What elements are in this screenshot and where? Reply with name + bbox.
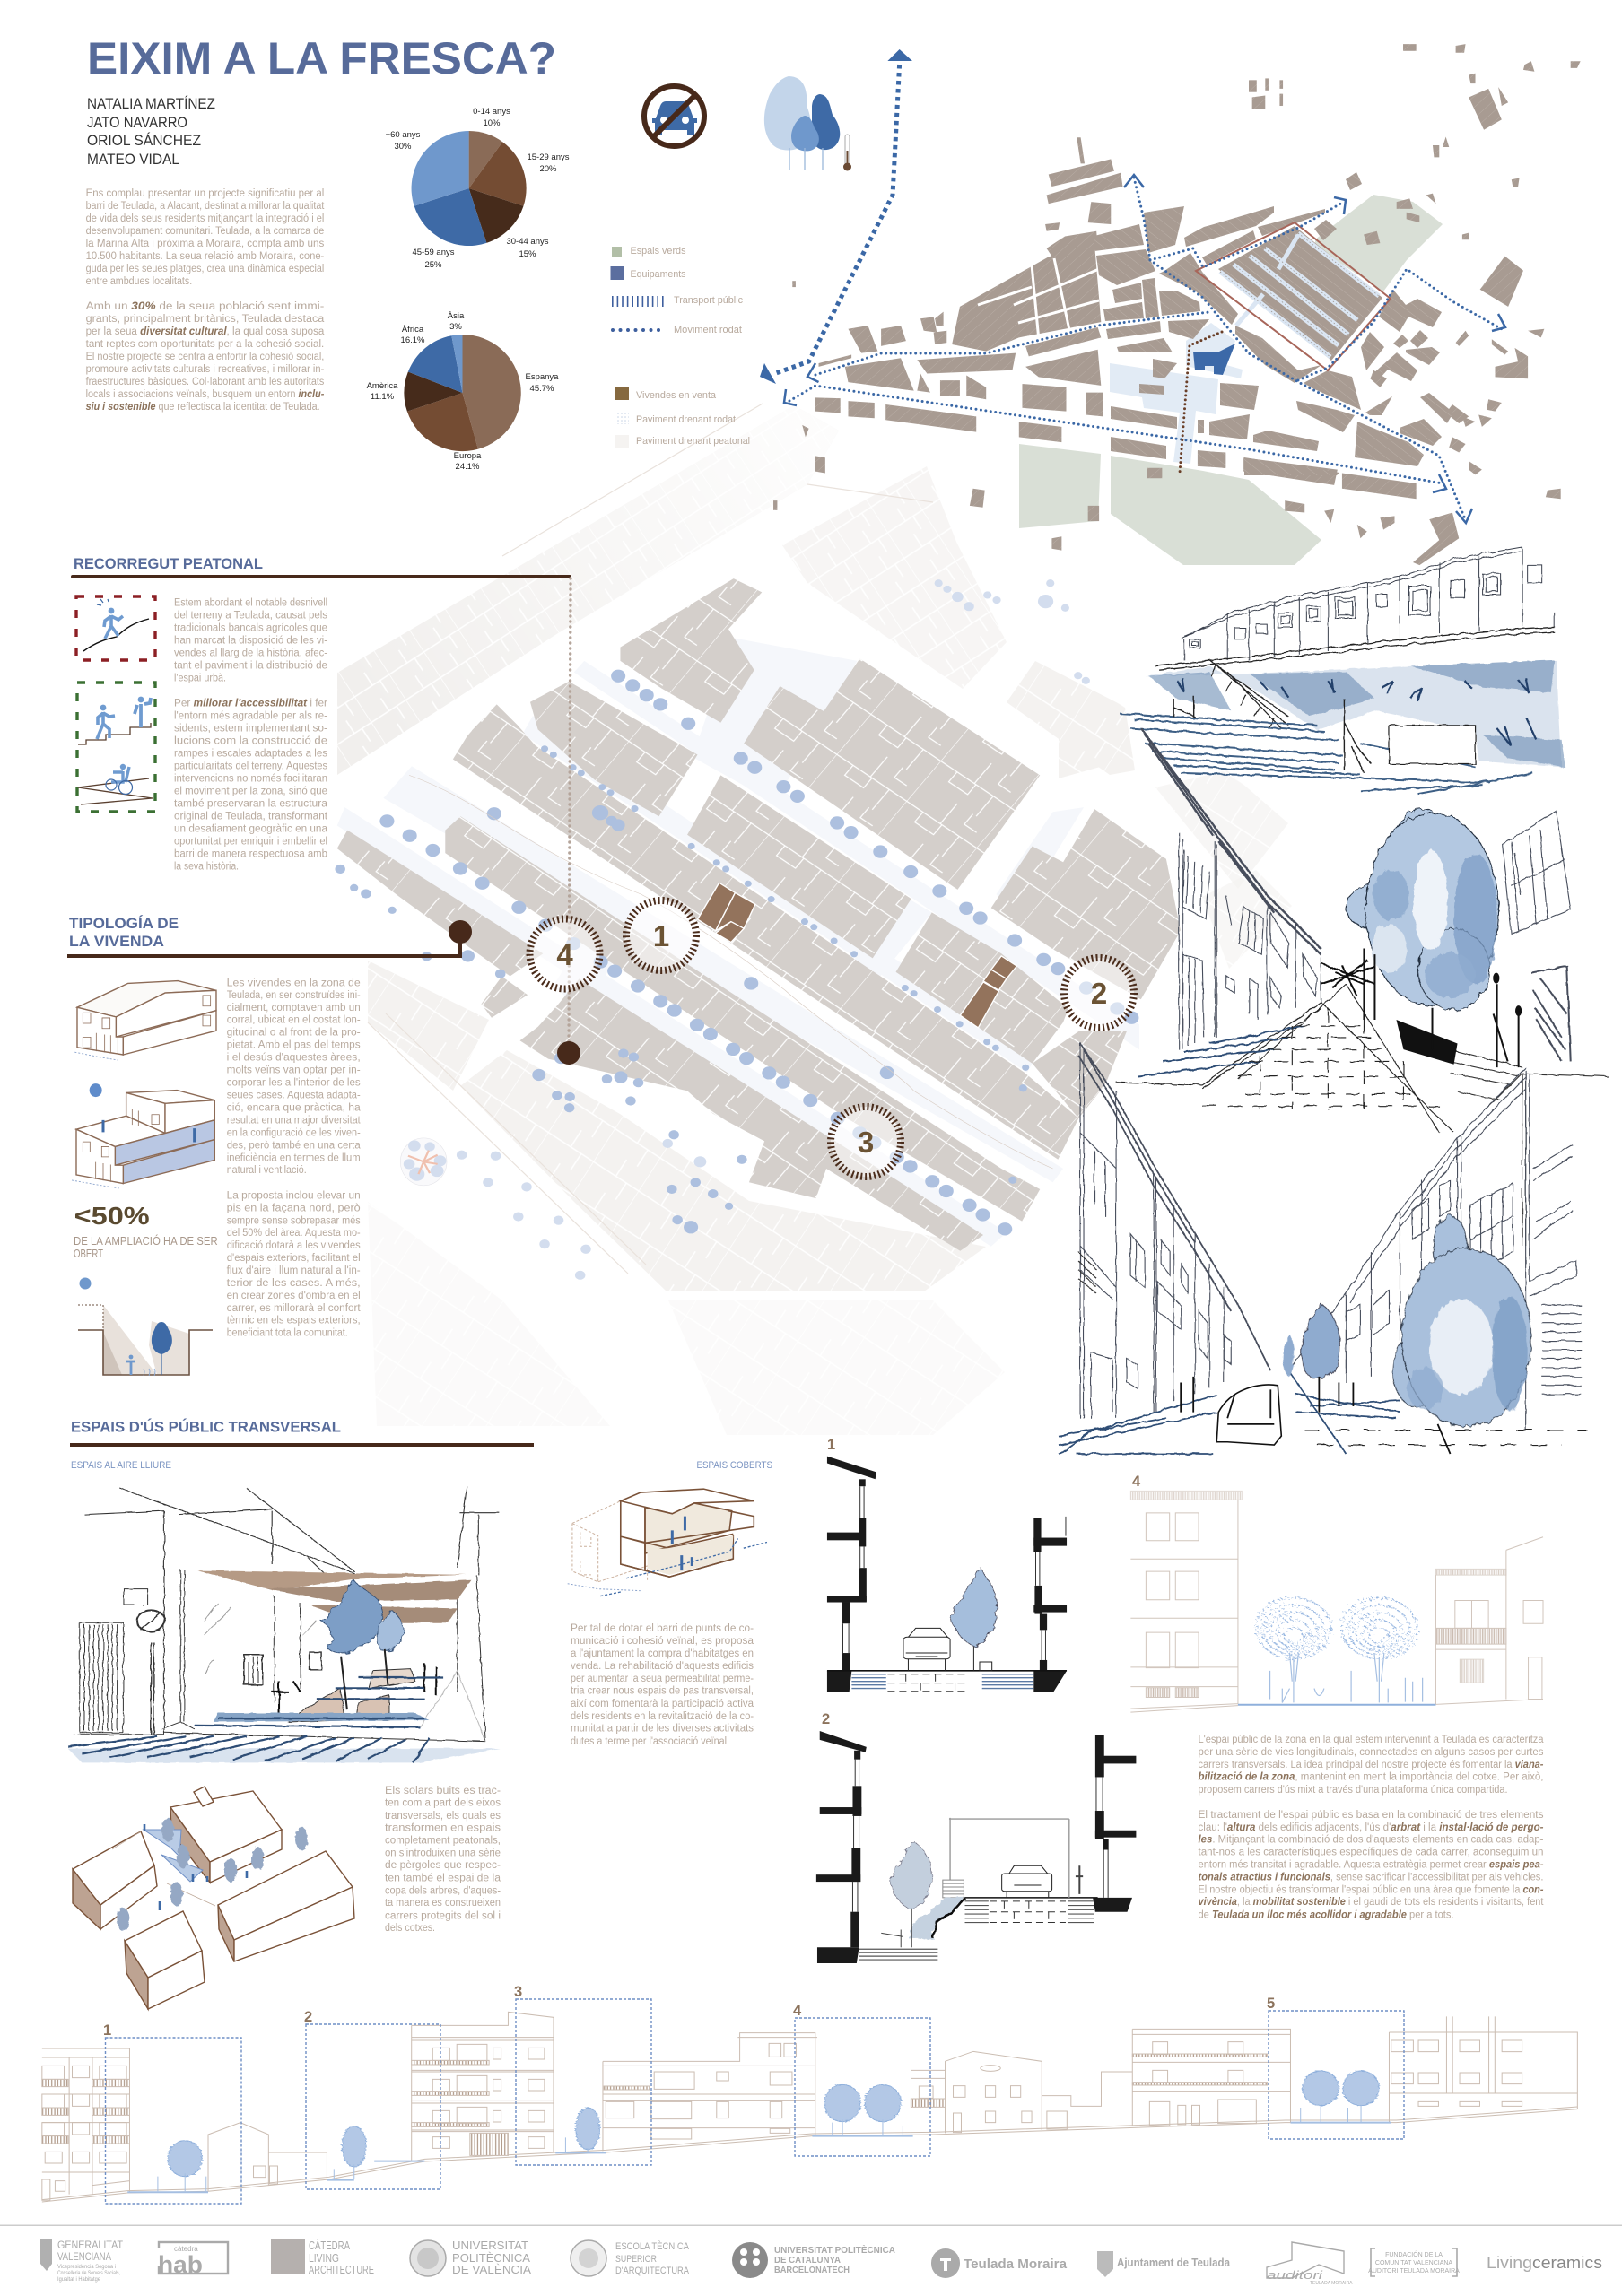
intro text: grants, principalment britànics, Teulada destaca — [86, 314, 325, 325]
text: espai public: tonals atractius i funcionals, sense sacrificar l'accessibilitat per als vehicles. — [1199, 1873, 1543, 1883]
pie chart: origin: 3% — [449, 322, 462, 332]
logo: catedra living architecture: LIVING — [309, 2252, 339, 2265]
elevation 4 — [1130, 1491, 1543, 1712]
authors: NATALIA MARTÍNEZ — [87, 95, 215, 112]
logo: auditori — [1267, 2242, 1353, 2286]
site map — [773, 44, 1581, 565]
text: molts veïns van optar per in- — [227, 1065, 361, 1075]
text: solars buits: ta manera es construeixen — [385, 1898, 501, 1909]
frame numbers: 3 — [514, 1984, 522, 2000]
text: solars buits: dels cotxes. — [385, 1923, 435, 1934]
logos — [40, 2239, 1602, 2286]
pie chart: age: 0-14 anys — [473, 107, 510, 117]
axonometric: covered space — [568, 1489, 767, 1596]
text: el moviment per la zona, sinó que — [174, 787, 327, 797]
legend: Equipaments — [630, 269, 686, 280]
text: natural i ventilació. — [227, 1165, 307, 1176]
numbered map markers — [529, 900, 1134, 1177]
text: carrer, es millorarà el confort — [227, 1303, 362, 1314]
text: espais coberts: dutes a terme per l'associació veïnal. — [571, 1736, 729, 1747]
text: espai public: proposem carrers d'ús mixt a través d'una plataforma única compartida. — [1199, 1785, 1507, 1796]
pie chart: origin — [367, 311, 559, 472]
axonometric: courtyards — [73, 1787, 354, 2009]
legend: Paviment drenant peatonal — [636, 436, 750, 447]
frame numbers — [103, 1984, 1275, 2039]
text: vendes al llarg de la història, afec- — [174, 648, 327, 659]
text: espai public: L'espai públic de la zona en la qual estem intervenint a Teulada es caracteritza — [1199, 1735, 1544, 1745]
logo: etsa — [571, 2240, 690, 2276]
legend: Transport públic — [674, 295, 743, 306]
text: l'espai urbà. — [174, 674, 226, 684]
text: ció, encara que pràctica, ha — [227, 1103, 361, 1114]
pie chart: age: 15-29 anys — [527, 152, 570, 162]
text: solars buits: transformen en espais — [385, 1823, 501, 1834]
heading — [69, 915, 179, 950]
logo: upv: UNIVERSITAT — [452, 2239, 528, 2252]
logo: fundacion: AUDITORI TEULADA MORAIRA — [1368, 2268, 1460, 2274]
legend — [610, 246, 750, 448]
intro text: entre ambdues localitats. — [86, 276, 192, 287]
central map plan — [335, 578, 1181, 1280]
text: Estem abordant el notable desnivell — [174, 598, 327, 609]
pie chart: origin: Àsia — [448, 311, 465, 321]
pie chart: age — [386, 107, 570, 270]
text: barri de manera respectuosa amb — [174, 849, 327, 860]
subheading open air: ESPAIS AL AIRE LLIURE — [71, 1460, 171, 1471]
text: espai public: per una sèrie de vies longitudinals, connectades en alguns casos per curtes — [1199, 1747, 1544, 1758]
legend: Vivendes en venta — [636, 390, 717, 401]
sketch: street with car — [1059, 1044, 1598, 1454]
intro text: de vida dels seus residents mitjançant la integració i el — [86, 213, 324, 224]
text: oportunitat per enriquir i embellir el — [174, 837, 327, 848]
panel: espais d'us public transversal — [68, 1419, 772, 2009]
text: espai public: El tractament de l'espai públic es basa en la combinació de tres elements — [1199, 1810, 1544, 1821]
authors — [87, 95, 215, 168]
text: cialment, comptaven amb un — [227, 1003, 361, 1013]
sketch: terraced garden — [1120, 547, 1565, 794]
logo: upc: UNIVERSITAT POLITÈCNICA — [774, 2244, 895, 2256]
panel: recorregut peatonal — [71, 556, 571, 873]
logo: etsa: SUPERIOR — [615, 2254, 657, 2265]
text: terior de les cases. A més, — [227, 1278, 361, 1289]
text: d'espais exteriors, facilitant el — [227, 1253, 361, 1264]
number 1: 1 — [827, 1437, 835, 1453]
text: espais coberts: tria crear nous espais de pas transversal, — [571, 1686, 754, 1697]
intro text: tant reptes com oportunitats per a la cohesió social. — [86, 339, 324, 350]
text: tant el paviment i la distribució de — [174, 661, 327, 672]
numbered map markers: 3 — [858, 1126, 874, 1159]
pie chart: age: +60 anys — [386, 130, 421, 140]
frame numbers: 5 — [1267, 1996, 1275, 2012]
intro text: barri de Teulada, a Alacant, destinat a millorar la qualitat — [86, 201, 325, 212]
text: en crear zones d'ombra en el — [227, 1291, 361, 1301]
text: espais coberts: venda. La rehabilitació d'aquests edificis — [571, 1661, 754, 1672]
text — [174, 598, 328, 873]
logo: generalitat: Conselleria de Serveis Socials, — [57, 2271, 120, 2276]
intro text: locals i associacions veïnals, busquem un entorn inclu- — [86, 389, 324, 400]
logo: generalitat: Igualtat i Habitatge — [57, 2277, 101, 2283]
logo: generalitat: VALENCIANA — [57, 2252, 111, 2263]
panel: tipologia de la vivenda — [67, 915, 472, 1376]
text: solars buits: Els solars buits es trac- — [385, 1786, 501, 1796]
title: EIXIM A LA FRESCA? — [87, 33, 556, 83]
sketch: street with tree — [1116, 728, 1609, 1246]
text: corporar-les a l'interior de les — [227, 1078, 361, 1089]
logo: catedra hab: càtedra — [174, 2245, 198, 2253]
text: del 50% del àrea. Aquesta mo- — [227, 1228, 361, 1239]
numbered map markers: 2 — [1091, 977, 1107, 1010]
text: espai public — [1199, 1735, 1544, 1920]
subheading covered: ESPAIS COBERTS — [696, 1460, 772, 1471]
logo: catedra living architecture: CÀTEDRA — [309, 2239, 351, 2252]
text: tèrmic en els espais exteriors, — [227, 1316, 361, 1326]
footer rule — [0, 2224, 1622, 2226]
text: espais coberts: dels residents en la revitalització de la co- — [571, 1711, 754, 1722]
text: solars buits: de pèrgoles que respec- — [385, 1860, 501, 1871]
legend: Moviment rodat — [674, 325, 742, 335]
logo: upv: POLITÈCNICA — [452, 2251, 531, 2265]
text: un desafiament geogràfic en una — [174, 824, 328, 835]
logo: living ceramics: Livingceramics — [1487, 2254, 1602, 2272]
icon: no cars — [644, 86, 704, 146]
intro text: per la seua diversitat cultural, la qual cosa suposa — [86, 326, 325, 337]
street section 1 — [827, 1457, 1067, 1692]
text: espai public: de Teulada un lloc més acollidor i agradable per a tots. — [1199, 1909, 1453, 1920]
logo: upc: BARCELONATECH — [774, 2266, 850, 2275]
number 4: 4 — [1132, 1474, 1141, 1490]
text: i el desús d'aquestes àrees, — [227, 1053, 361, 1064]
intro text: Amb un 30% de la seua població sent immi- — [86, 301, 324, 312]
house diagram proposed — [72, 1083, 214, 1188]
faded surrounding urban fabric — [337, 404, 1292, 1435]
pie chart: origin: Àfrica — [402, 325, 424, 335]
text: pietat. Amb el pas del temps — [227, 1040, 361, 1051]
stat: less than 50%: OBERT — [74, 1248, 103, 1260]
text: dificació dotarà a les vivendes — [227, 1240, 361, 1251]
text: corral, ubicat en el costat lon- — [227, 1015, 361, 1026]
logo: teulada moraira: Teulada Moraira — [964, 2257, 1068, 2272]
text: espais coberts: Per tal de dotar el barri de punts de co- — [571, 1623, 754, 1634]
text: des, però també en una certa — [227, 1140, 361, 1151]
plaza rosette — [400, 1138, 447, 1186]
logo: auditori: TEULADA MORAIRA — [1310, 2281, 1353, 2286]
text: pis en la façana nord, però — [227, 1203, 361, 1213]
text: també preservaran la estructura — [174, 799, 328, 810]
intro text: Ens complau presentar un projecte significatiu per al — [86, 188, 324, 199]
pie chart: age: 45-59 anys — [412, 248, 455, 257]
west town blocks — [773, 44, 1581, 565]
pie chart: origin: Espanya — [526, 372, 559, 382]
text: en la configuració de les viven- — [227, 1127, 361, 1138]
text: tradicionals bancals agrícoles que — [174, 623, 327, 634]
intro text: El nostre projecte se centra a enfortir la cohesió social, — [86, 352, 324, 362]
logo: upv — [410, 2239, 532, 2276]
icon: stairs and ramp — [77, 683, 155, 812]
text: resultat en una major diversitat — [227, 1116, 361, 1126]
houses for sale — [698, 883, 1016, 1028]
pie chart: origin: 45.7% — [530, 384, 554, 394]
pie chart: age: 30-44 anys — [506, 237, 549, 247]
diagram: street shade — [78, 1277, 213, 1376]
frame numbers: 4 — [793, 2003, 802, 2019]
heading: ESPAIS D'ÚS PÚBLIC TRANSVERSAL — [71, 1419, 341, 1435]
logo: auditori: auditori — [1267, 2268, 1324, 2282]
pie chart: age: 20% — [539, 164, 557, 174]
stat: less than 50%: <50% — [74, 1202, 150, 1230]
elevation trees — [1238, 1597, 1435, 1705]
text: Per millorar l'accessibilitat i fer — [174, 699, 327, 709]
movement arrows — [784, 175, 1505, 523]
east town blocks — [1094, 172, 1453, 475]
intro text: desenvolupament comunitari. Teulada, a la comarca de — [86, 226, 324, 237]
text: espais coberts: així com fomentarà la participació activa — [571, 1699, 754, 1709]
authors: ORIOL SÁNCHEZ — [87, 132, 201, 149]
frame numbers: 1 — [103, 2022, 111, 2039]
logo: generalitat: Vicepresidència Segona i — [57, 2265, 116, 2270]
logo: catedra hab: hab — [158, 2251, 203, 2278]
highlight frames — [106, 1999, 1404, 2204]
text: gitudinal o al front de la pro- — [227, 1028, 361, 1039]
logo: generalitat: GENERALITAT — [57, 2240, 123, 2251]
logo: upc: DE CATALUNYA — [774, 2256, 841, 2266]
heading: LA VIVENDA — [69, 934, 164, 950]
legend: Espais verds — [630, 246, 686, 257]
text: espais coberts — [571, 1623, 754, 1747]
pie chart: age: 15% — [519, 249, 536, 259]
elevation trees in blue — [127, 2071, 1391, 2192]
numbered map markers: 1 — [653, 919, 669, 952]
pie chart: age: 30% — [394, 142, 412, 152]
text: rampes i escales adaptades a les — [174, 749, 327, 760]
text: solars buits: copa dels arbres, d'aques- — [385, 1885, 501, 1896]
house diagram existing — [74, 981, 216, 1060]
text — [227, 978, 362, 1339]
logo: upv: DE VALÈNCIA — [452, 2263, 532, 2276]
logo: upc — [732, 2242, 895, 2278]
text: han marcat la disposició de les vi- — [174, 636, 327, 647]
curved drainage lines — [409, 775, 1053, 1169]
west town street cuts — [978, 242, 1111, 341]
text: original de Teulada, transformant — [174, 812, 328, 822]
text: solars buits: on s'introduixen una sèrie — [385, 1848, 501, 1858]
pin line — [67, 920, 472, 956]
text: espai public: vivència, la mobilitat sostenible i el gaudi de tots els residents i visitants, fent — [1199, 1897, 1544, 1908]
text: flux d'aire i llum natural a l'in- — [227, 1265, 361, 1276]
logo: etsa: ESCOLA TÈCNICA — [615, 2240, 690, 2252]
intro text: 10.500 habitants. La seua relació amb Moraira, cone- — [86, 251, 324, 262]
logo: teulada moraira — [931, 2248, 1068, 2278]
heading: RECORREGUT PEATONAL — [74, 556, 263, 572]
text: l'entorn més agradable per als re- — [174, 711, 327, 722]
text: espai public: bilització de la zona, mantenint en ment la importància del cotxe. Per això, — [1199, 1772, 1543, 1783]
logo: fundacion: COMUNITAT VALENCIANA — [1375, 2260, 1452, 2266]
text: ineficiència en termes de llum — [227, 1152, 361, 1163]
text: sempre sense sobrepasar més — [227, 1215, 361, 1226]
pie chart: age: 10% — [483, 118, 501, 128]
long street elevation — [42, 2012, 1577, 2202]
pie chart: origin: 11.1% — [371, 392, 395, 402]
text: espais coberts: munitat a partir de les diverses activitats — [571, 1724, 754, 1735]
text: espai public: El nostre objectiu és transformar l'espai públic en una àrea que fomente la con- — [1199, 1884, 1544, 1895]
text: espais coberts: a l'ajuntament la compra d'habitatges en — [571, 1648, 754, 1659]
logo: catedra living architecture — [271, 2239, 374, 2276]
numbered map markers: 4 — [556, 938, 573, 971]
logo: ajuntament de teulada: Ajuntament de Teulada — [1117, 2256, 1231, 2269]
logo: ajuntament de teulada — [1097, 2251, 1231, 2277]
text: La proposta inclou elevar un — [227, 1190, 361, 1201]
pie chart: origin: Europa — [454, 451, 482, 461]
text: espai public: carrers transversals. La idea principal del nostre projecte és fomentar la viana- — [1199, 1760, 1544, 1770]
logo: etsa: D'ARQUITECTURA — [615, 2266, 690, 2276]
intro text: guda per les seues platges, crea una dinàmica especial — [86, 264, 324, 274]
text: sidents, estem implementant so- — [174, 724, 327, 735]
text: espai public: les. Mitjançant la combinació de dos d'aquests elements en cada cas, adap- — [1199, 1835, 1544, 1846]
pie chart: age: 25% — [424, 260, 442, 270]
intro text: siu i sostenible que reflectisca la identitat de Teulada. — [86, 402, 320, 413]
logo: fundacion — [1368, 2248, 1460, 2276]
text: beneficiant tota la comunitat. — [227, 1328, 348, 1339]
text: espai public: clau: l'altura dels edificis adjacents, l'ús d'arbrat i la instal·lació de pergo- — [1199, 1822, 1544, 1833]
text: espais coberts: municació i cohesió veïnal, es proposa — [571, 1636, 754, 1647]
intro text: la Marina Alta i pròxima a Moraira, compta amb uns — [86, 239, 325, 249]
heading: TIPOLOGÍA DE — [69, 915, 179, 932]
authors: MATEO VIDAL — [87, 151, 179, 168]
icon: slope person — [76, 596, 155, 660]
authors: JATO NAVARRO — [87, 114, 187, 131]
text: lucions com la construcció de — [174, 736, 327, 747]
text: solars buits: ten també el espai de la — [385, 1873, 501, 1883]
icon: trees and thermometer — [764, 76, 851, 170]
text: Teulada, en ser construïdes ini- — [227, 990, 361, 1001]
street trees — [335, 670, 1138, 1235]
dotted connector and pin — [557, 578, 580, 1065]
text: solars buits: carrers protegits del sol i — [385, 1910, 501, 1921]
pie chart: origin: 24.1% — [456, 462, 480, 472]
project area — [1196, 222, 1391, 370]
text: Les vivendes en la zona de — [227, 978, 361, 988]
text: particularitats del terreny. Aquestes — [174, 761, 327, 772]
pie chart: origin: 16.1% — [401, 335, 425, 345]
intro text: fraestructures bàsiques. Col·laborant amb les autoritats — [86, 377, 325, 387]
text: espai public: tant-nos a les característiques específiques de cada carrer, aconseguim un — [1199, 1848, 1543, 1858]
big public transport arrow — [760, 49, 912, 384]
text: solars buits: transversals, els quals es — [385, 1811, 501, 1822]
green areas and plazas — [1019, 195, 1443, 565]
sketch: pergola plaza — [68, 1486, 500, 1762]
text: del terreny a Teulada, causat pels — [174, 611, 327, 622]
frame numbers: 2 — [304, 2009, 312, 2025]
text: la seva història. — [174, 862, 239, 873]
text: solars buits — [385, 1786, 501, 1934]
text: espai public: entorn més transitat i agradable. Aquesta estratègia permet crear espais pea- — [1199, 1860, 1544, 1871]
logo: fundacion: FUNDACIÓN DE LA — [1385, 2250, 1443, 2258]
text: espais coberts: per aumentar la seua permeabilitat perme- — [571, 1674, 754, 1684]
text: intervencions no només facilitaran — [174, 774, 327, 785]
number 2: 2 — [822, 1711, 830, 1727]
intro text: promoure activitats culturals i recreatives, i millorar in- — [86, 364, 324, 375]
text: solars buits: completament peatonals, — [385, 1836, 501, 1847]
pie chart: origin: Amèrica — [367, 381, 398, 391]
street sketches — [1059, 547, 1609, 1454]
logo: generalitat — [40, 2239, 123, 2283]
street section 2 — [816, 1731, 1136, 1963]
stat: less than 50%: DE LA AMPLIACIÓ HA DE SER — [74, 1234, 218, 1248]
logo: catedra hab — [154, 2242, 228, 2278]
text: solars buits: ten com a part dels eixos — [385, 1798, 501, 1809]
text: seues cases. Aquesta adapta- — [227, 1091, 361, 1101]
intro text — [86, 188, 325, 413]
legend: Paviment drenant rodat — [636, 414, 736, 425]
logo: catedra living architecture: ARCHITECTURE — [309, 2264, 374, 2276]
stat: less than 50% — [74, 1202, 218, 1260]
